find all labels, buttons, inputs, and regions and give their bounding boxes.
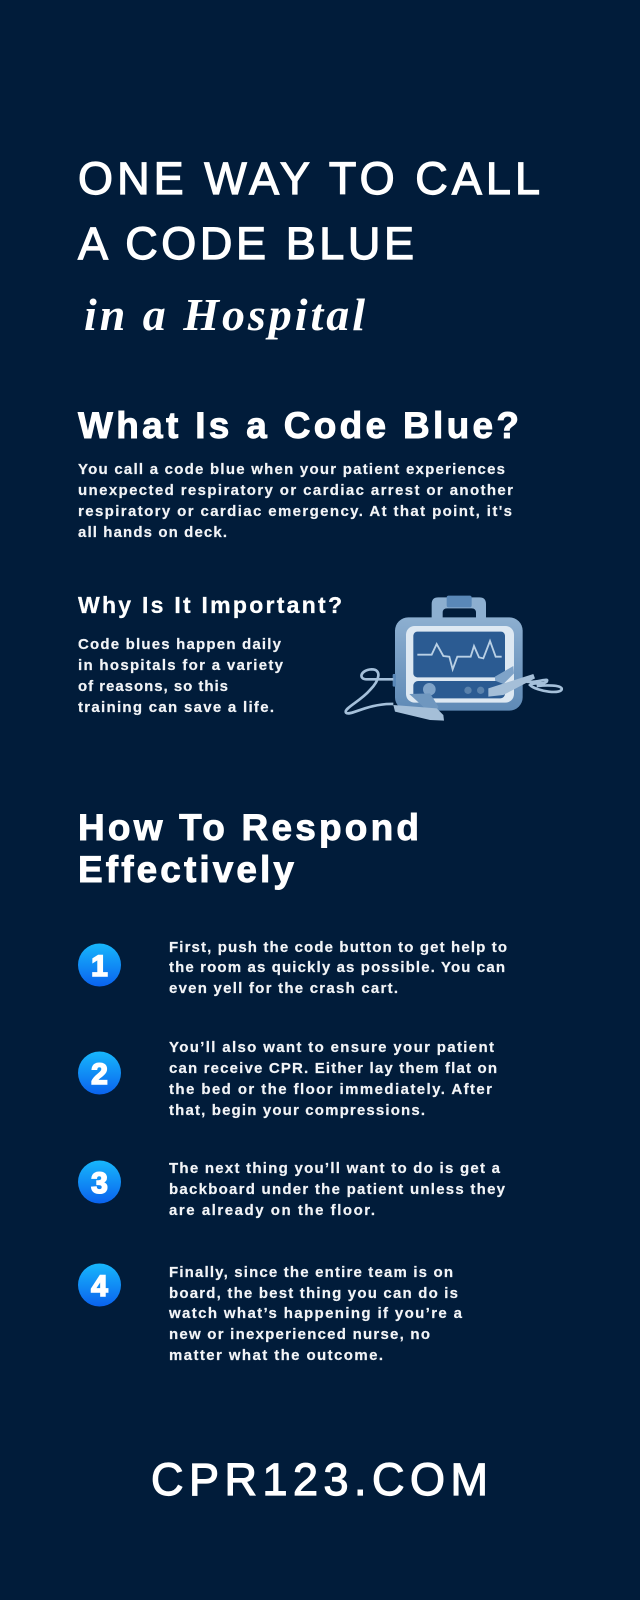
step 4 text: watch what’s happening if you’re a xyxy=(168,1305,463,1322)
icon: defibrillator xyxy=(346,596,562,721)
step 3 text: are already on the floor. xyxy=(169,1202,375,1219)
step 4 badge: 4 xyxy=(91,1270,108,1303)
step 2 text: the bed or the floor immediately. After xyxy=(169,1081,492,1098)
footer: website: CPR123.COM xyxy=(151,1454,488,1505)
heading: how to respond effectively: How To Respond xyxy=(78,807,419,848)
title: ONE WAY TO CALL xyxy=(78,153,540,204)
text block: definition: unexpected respiratory or cardiac arrest or another xyxy=(78,482,513,499)
step 4 text: matter what the outcome. xyxy=(169,1347,383,1364)
heading: why is it important: Why Is It Important? xyxy=(78,592,342,618)
step 4 text: Finally, since the entire team is on xyxy=(169,1264,453,1281)
text block: definition: respiratory or cardiac emergency. At that point, it's xyxy=(78,503,512,520)
heading: how to respond effectively xyxy=(78,807,419,890)
heading: what is a code blue: What Is a Code Blue? xyxy=(78,405,519,446)
step 2 text xyxy=(169,1039,497,1119)
step 1 badge xyxy=(78,944,121,986)
title xyxy=(78,153,540,340)
step 1 badge: 1 xyxy=(91,950,108,983)
text block: importance xyxy=(78,636,284,716)
step 4 text xyxy=(168,1264,463,1364)
step 2 text: that, begin your compressions. xyxy=(169,1102,425,1119)
heading: how to respond effectively: Effectively xyxy=(78,849,294,890)
step 3 text: backboard under the patient unless they xyxy=(169,1181,506,1198)
text block: definition: all hands on deck. xyxy=(78,524,227,541)
text block: importance: in hospitals for a variety xyxy=(78,657,284,674)
step 1 text: even yell for the crash cart. xyxy=(169,980,398,997)
step 3 text xyxy=(169,1160,506,1219)
step 3 text: The next thing you’ll want to do is get a xyxy=(169,1160,501,1177)
step 2 text: You’ll also want to ensure your patient xyxy=(169,1039,494,1056)
step 2 text: can receive CPR. Either lay them flat on xyxy=(169,1060,497,1077)
text block: importance: of reasons, so this xyxy=(78,678,228,695)
step 3 badge: 3 xyxy=(91,1167,108,1200)
step 4 text: board, the best thing you can do is xyxy=(169,1285,458,1302)
text block: importance: Code blues happen daily xyxy=(78,636,282,653)
text block: definition xyxy=(78,461,513,541)
step 4 text: new or inexperienced nurse, no xyxy=(169,1326,430,1343)
text block: definition: You call a code blue when your patient experiences xyxy=(78,461,505,478)
step 1 text xyxy=(169,939,507,997)
step 1 text: the room as quickly as possible. You can xyxy=(169,959,505,976)
step 1 text: First, push the code button to get help to xyxy=(169,939,507,956)
title: A CODE BLUE xyxy=(78,218,414,269)
step 2 badge xyxy=(78,1052,121,1094)
step 4 badge xyxy=(78,1264,121,1306)
step 2 badge: 2 xyxy=(91,1058,108,1091)
text block: importance: training can save a life. xyxy=(78,699,274,716)
step 3 badge xyxy=(78,1160,121,1204)
title: in a Hospital xyxy=(84,289,365,340)
